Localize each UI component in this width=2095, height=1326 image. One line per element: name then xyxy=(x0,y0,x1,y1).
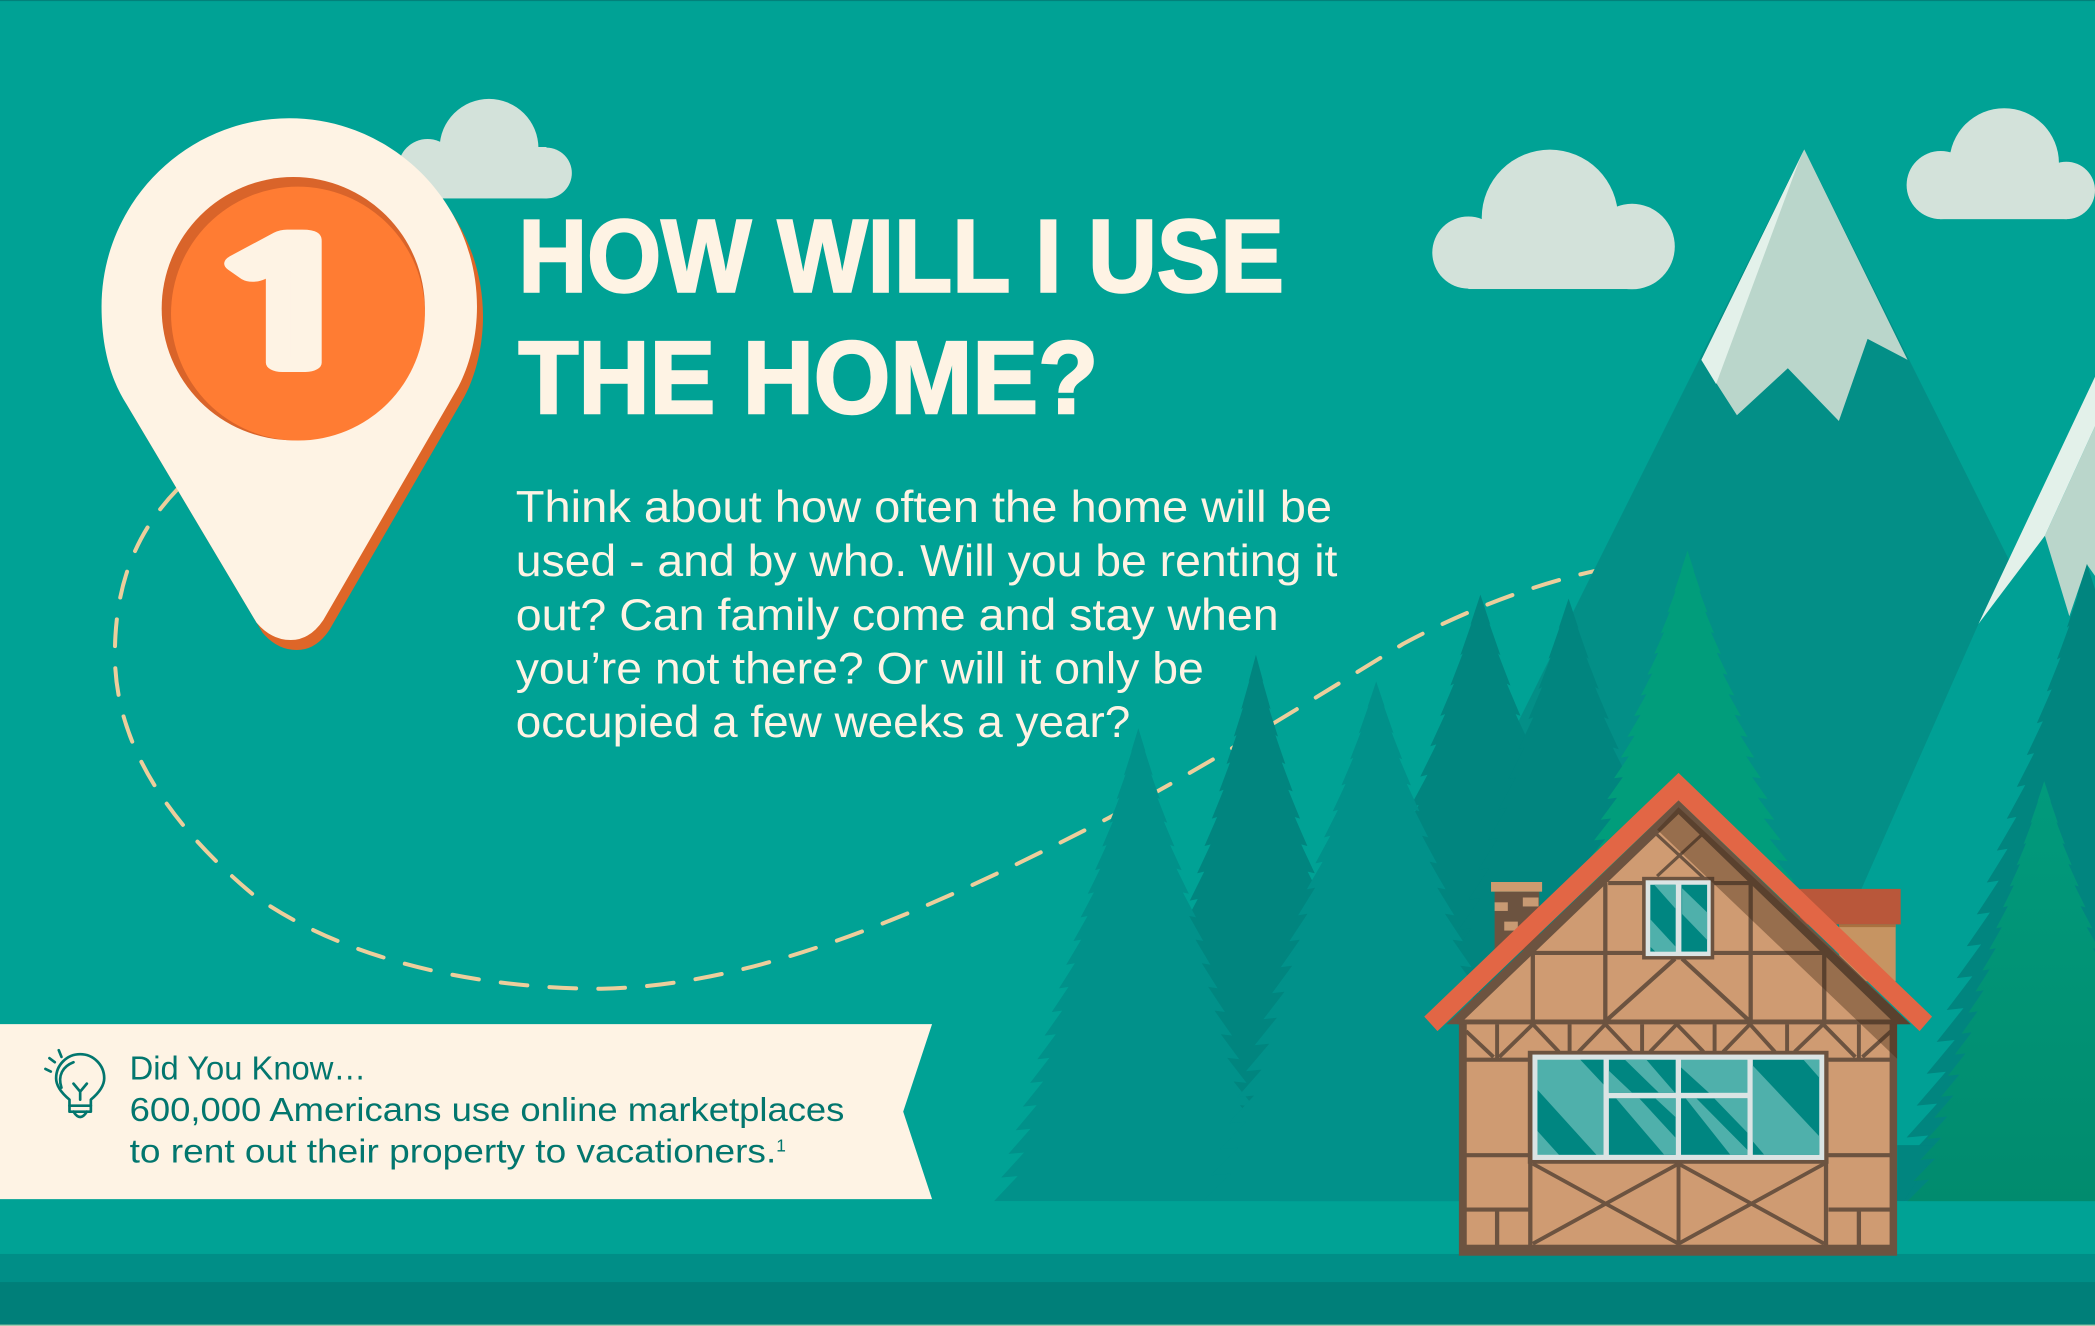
body text: used - and by who. Will you be renting it xyxy=(516,537,1337,586)
body text xyxy=(516,483,1337,747)
chimney xyxy=(1491,882,1542,950)
upper window xyxy=(1642,877,1714,960)
back dark trees xyxy=(1109,564,2095,1201)
title xyxy=(518,198,1284,435)
right mountain xyxy=(1724,377,2095,1201)
banner text: Did You Know… xyxy=(130,1051,366,1088)
green tree right xyxy=(1907,781,2095,1202)
cloud behind pin xyxy=(398,99,572,198)
red roof xyxy=(1424,773,1932,1031)
green tree behind house xyxy=(1554,551,1821,965)
front forest trees xyxy=(994,681,1550,1201)
house xyxy=(1424,773,1932,1256)
body text: out? Can family come and stay when xyxy=(516,591,1279,640)
main mountain xyxy=(1279,149,2095,1201)
banner text: 1 xyxy=(776,1136,786,1156)
did you know banner xyxy=(0,1024,932,1199)
cloud right xyxy=(1907,108,2095,219)
dashed route line xyxy=(115,489,1597,989)
icon: light bulb xyxy=(45,1050,104,1117)
cloud centre xyxy=(1432,150,1675,289)
body text: you’re not there? Or will it only be xyxy=(516,644,1204,693)
main window xyxy=(1528,1051,1829,1164)
pin body xyxy=(102,118,477,640)
body text: Think about how often the home will be xyxy=(516,483,1332,532)
title: THE HOME? xyxy=(518,320,1098,435)
annex building behind xyxy=(1800,889,1901,981)
number 1: 1 xyxy=(199,224,375,390)
body text: occupied a few weeks a year? xyxy=(516,698,1130,747)
ground bands xyxy=(0,1201,2095,1326)
banner text: to rent out their property to vacationers. xyxy=(130,1133,776,1170)
banner text: 600,000 Americans use online marketplaces xyxy=(130,1092,844,1129)
roof shadow xyxy=(1657,807,1911,1059)
pin shadow xyxy=(108,128,483,650)
banner text xyxy=(130,1051,844,1170)
top edge line xyxy=(0,0,2095,1)
location pin xyxy=(102,118,483,650)
title: HOW WILL I USE xyxy=(518,198,1284,313)
house walls and timber frame xyxy=(1446,800,1911,1256)
orange disc xyxy=(162,177,425,441)
